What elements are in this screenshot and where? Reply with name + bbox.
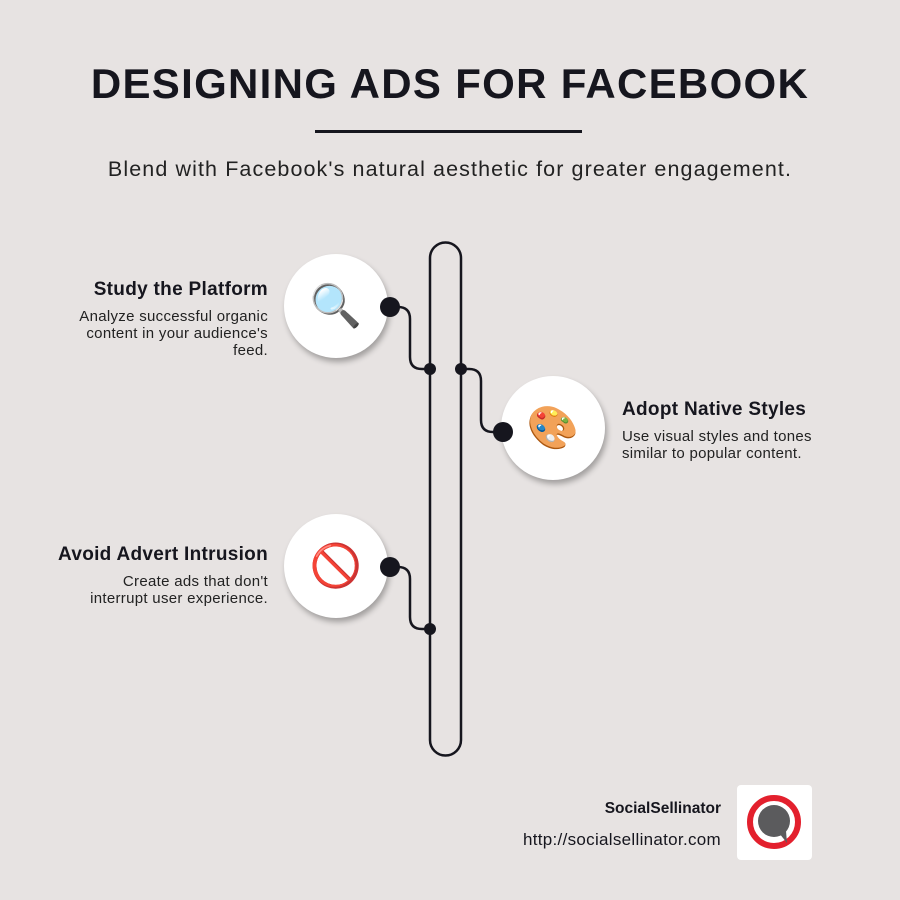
- text: Adopt Native Styles: Adopt Native Styles: [622, 399, 806, 420]
- icon: magnifier: [284, 254, 388, 358]
- brand text: http://socialsellinator.com: [523, 830, 721, 849]
- text: Study the Platform: Analyze successful organic content in your audience's feed.: [79, 308, 268, 359]
- brand text: [523, 800, 721, 849]
- text: Adopt Native Styles: [622, 399, 812, 462]
- icon: palette: 🎨: [527, 404, 579, 452]
- title underline: [315, 130, 582, 133]
- text: Adopt Native Styles: Use visual styles and tones similar to popular content.: [622, 428, 812, 462]
- logo: [737, 785, 812, 860]
- brand text: SocialSellinator: [605, 800, 721, 817]
- text: Avoid Advert Intrusion: Avoid Advert Intrusion: [58, 544, 268, 565]
- icon: no entry: 🚫: [310, 542, 362, 590]
- title: DESIGNING ADS FOR FACEBOOK: [91, 60, 809, 107]
- icon: magnifier: 🔍: [310, 282, 362, 330]
- icon: no entry: [284, 514, 388, 618]
- icon: palette: [501, 376, 605, 480]
- text: Avoid Advert Intrusion: Create ads that don't: [123, 573, 268, 590]
- subtitle: Blend with Facebook's natural aesthetic for greater engagement.: [108, 157, 792, 181]
- text: Avoid Advert Intrusion: [58, 544, 268, 607]
- text: Avoid Advert Intrusion: interrupt user experience.: [90, 590, 268, 607]
- text: Study the Platform: [79, 279, 268, 359]
- text: Study the Platform: Study the Platform: [94, 279, 268, 300]
